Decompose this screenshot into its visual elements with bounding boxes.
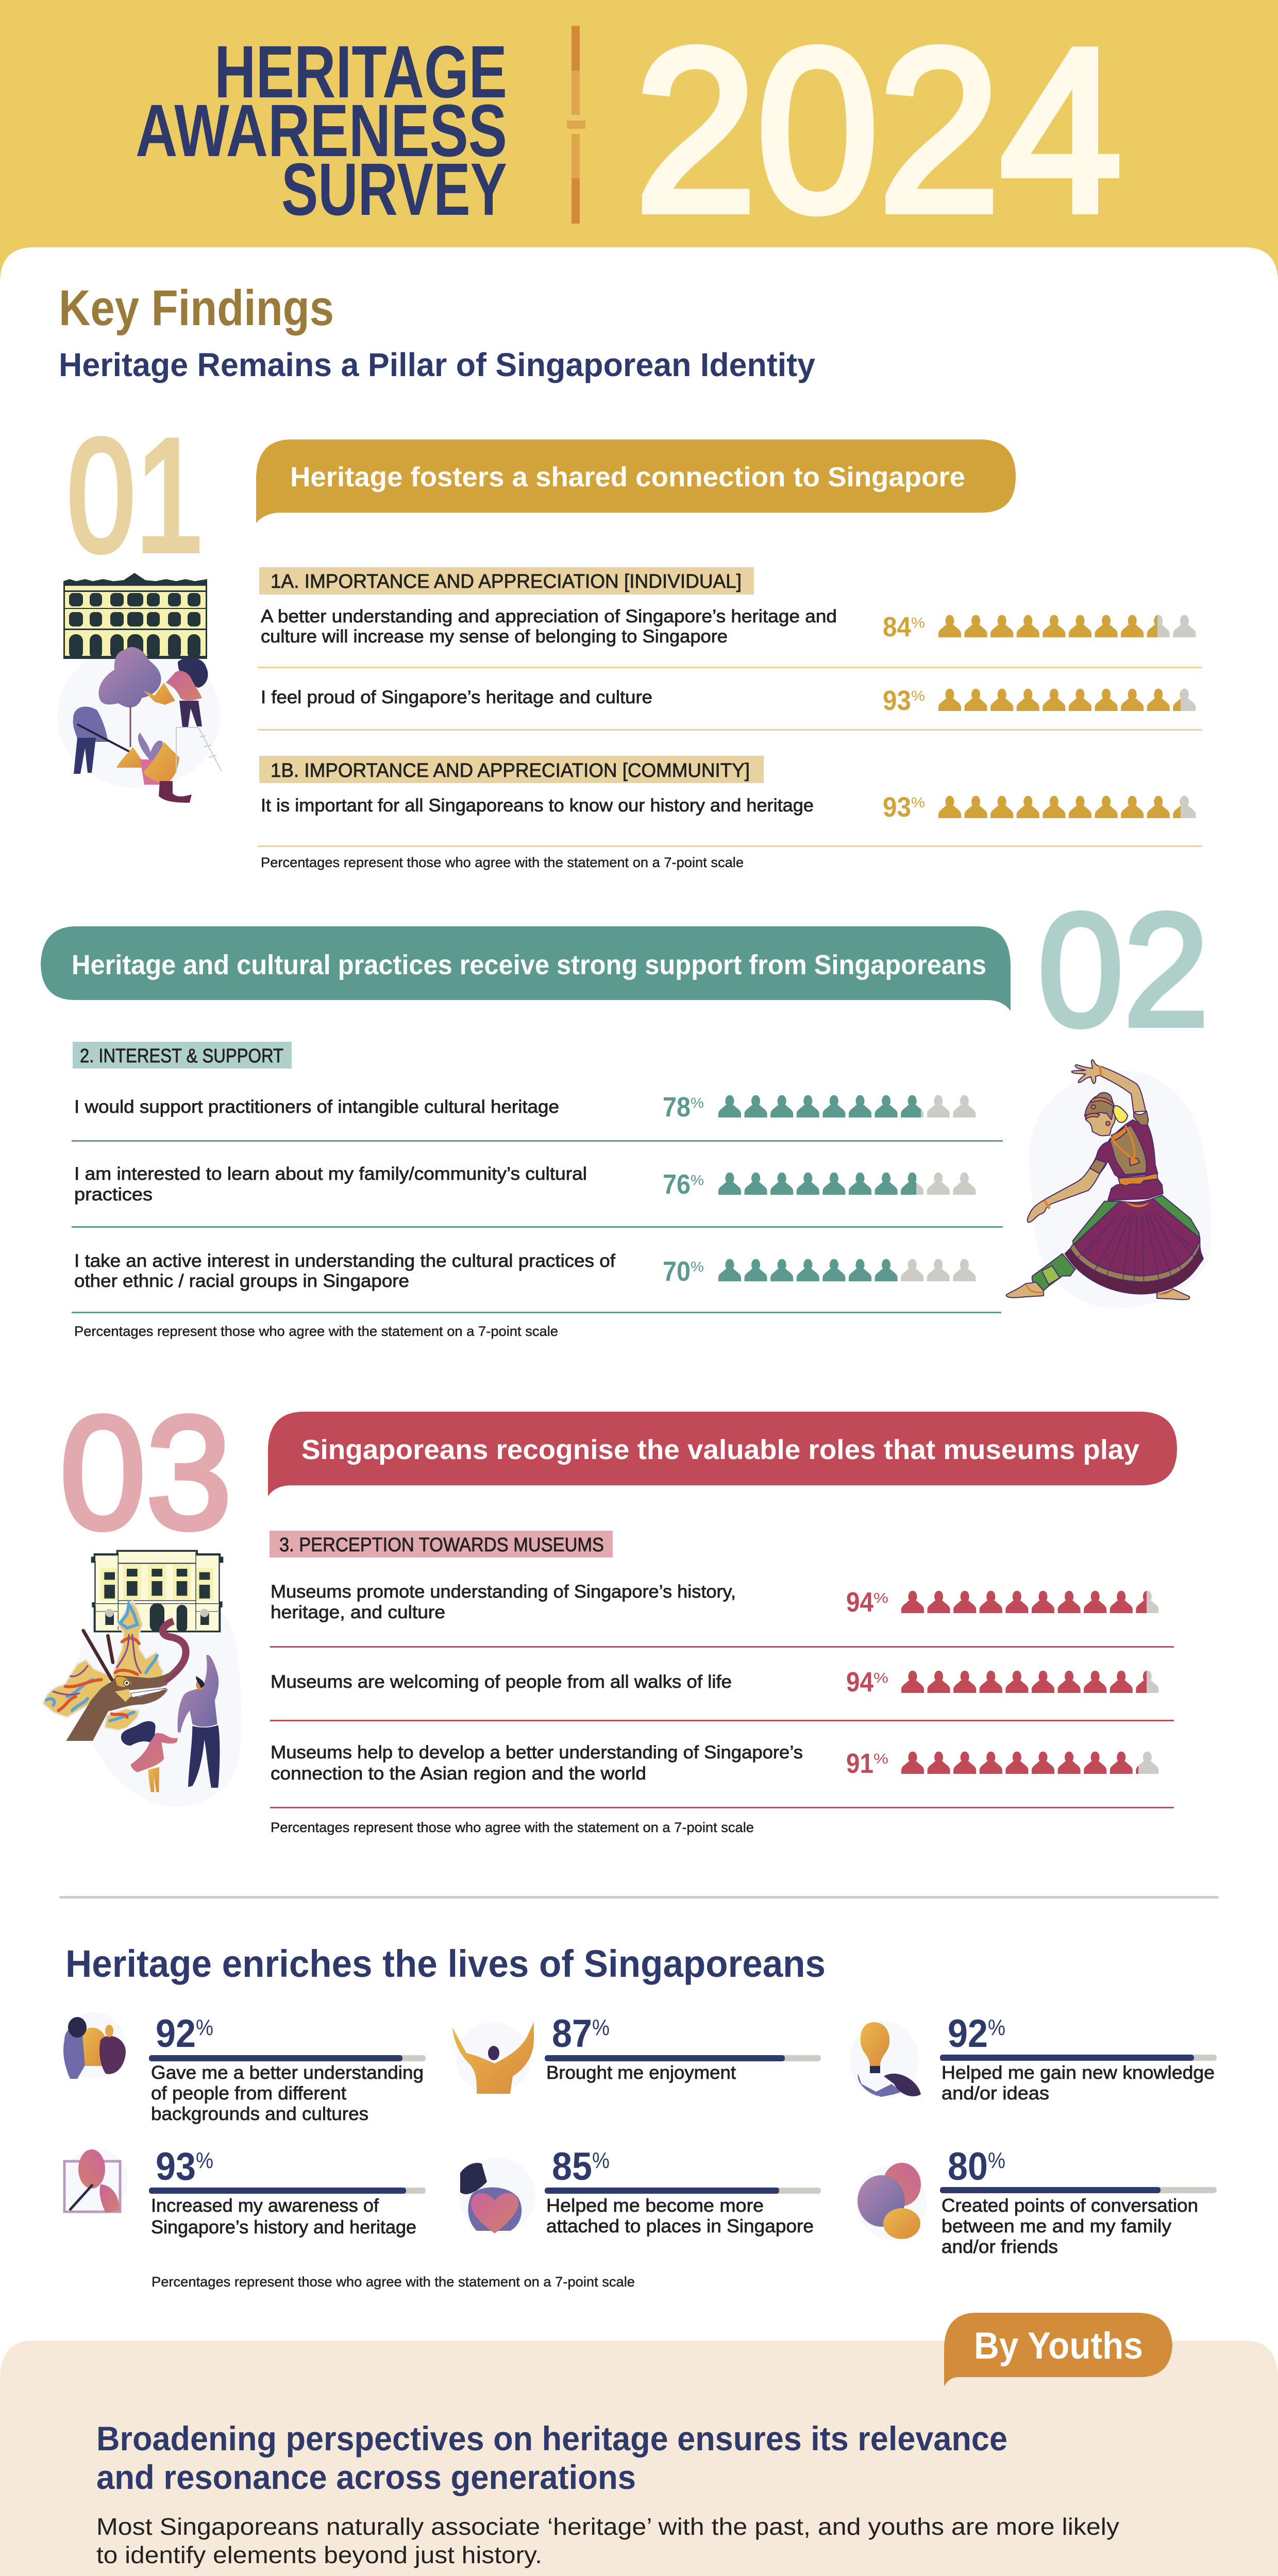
stat: 85% attached: 85 — [552, 2145, 592, 2189]
row: other groups 70%: other ethnic / racial groups in Singapore — [74, 1271, 409, 1291]
row: other groups 70%: % — [691, 1259, 704, 1275]
stat: 85% attached: % — [592, 2148, 610, 2173]
stat: 93% awareness: Increased my awareness of — [151, 2195, 379, 2216]
tag 2: 2. INTEREST & SUPPORT — [80, 1045, 283, 1067]
row: other groups 70%: I take an active interest in understanding the cultural practices of — [74, 1251, 615, 1271]
row: support practitioners 78% — [75, 1095, 976, 1117]
banner 01: Heritage fosters a shared connection to Singapore — [290, 462, 965, 493]
header divider — [567, 26, 585, 224]
row: know our history 93%: 93 — [883, 792, 911, 823]
row: promote understanding 94%: Museums promote understanding of Singapore’s history, — [271, 1582, 736, 1602]
illustration: dancer — [1006, 1060, 1211, 1309]
panel: finding 02 — [41, 880, 1211, 1339]
row: know our history 93% — [262, 795, 1196, 818]
row: promote understanding 94% — [271, 1582, 1158, 1622]
banner 03 — [268, 1412, 1177, 1496]
stat: 92% knowledge: Helped me gain new knowledge — [941, 2062, 1215, 2083]
stat: 80% conversation: and/or friends — [941, 2236, 1058, 2257]
title: Heritage Awareness Survey — [136, 30, 507, 231]
numeral 03: 03 — [60, 1383, 232, 1563]
heading: broadening perspectives — [96, 2419, 1007, 2496]
stat: 85% attached — [459, 2145, 821, 2236]
row: welcoming 94%: % — [873, 1670, 888, 1686]
stat: 87% enjoyment: Brought me enjoyment — [546, 2062, 736, 2083]
numeral 01: 01 — [67, 406, 204, 585]
title: Heritage Awareness Survey: AWARENESS — [136, 89, 507, 172]
heading: broadening perspectives: Broadening perspectives on heritage ensures its relevance — [96, 2419, 1007, 2458]
panel: finding 01 — [57, 406, 1202, 870]
stat: 93% awareness: Singapore’s history and heritage — [151, 2216, 416, 2238]
stat: 80% conversation: Created points of conversation — [941, 2195, 1198, 2216]
badge: By Youths — [944, 2313, 1172, 2386]
banner 03: Singaporeans recognise the valuable roles that museums play — [301, 1434, 1139, 1465]
stat: 80% conversation: between me and my family — [941, 2215, 1171, 2236]
row: sense of belonging 84%: 84 — [883, 612, 911, 642]
tag 3: 3. PERCEPTION TOWARDS MUSEUMS — [279, 1534, 604, 1556]
stat: 92% knowledge: and/or ideas — [941, 2082, 1049, 2104]
heading: Key Findings: Key Findings — [59, 280, 334, 336]
stat: 87% enjoyment — [452, 2012, 821, 2094]
heading: Heritage enriches the lives of Singaporeans — [65, 1942, 826, 1985]
year 2024: 2024 — [635, 1, 1122, 260]
panel: finding 03 — [43, 1383, 1177, 1835]
row: proud 93% — [262, 688, 1196, 711]
banner 01 — [256, 439, 1016, 523]
subheading: Heritage Remains a Pillar of Singaporean Identity — [59, 346, 815, 383]
stat: 87% enjoyment: 87 — [552, 2012, 592, 2056]
stat: 92% understanding: % — [196, 2015, 213, 2040]
body text: broadening — [96, 2513, 1119, 2568]
row: other groups 70% — [74, 1251, 976, 1291]
row: welcoming 94%: 94 — [846, 1667, 873, 1698]
row: sense of belonging 84%: A better understanding and appreciation of Singapore’s heritage and — [261, 606, 837, 626]
body text: broadening: Most Singaporeans naturally associate ‘heritage’ with the past, and youths are more likely — [96, 2513, 1119, 2540]
row: welcoming 94%: Museums are welcoming of people from all walks of life — [271, 1672, 732, 1692]
row: sense of belonging 84%: culture will increase my sense of belonging to Singapore — [261, 626, 728, 647]
row: family practices 76%: I am interested to learn about my family/community’s cultural — [74, 1164, 587, 1184]
row: sense of belonging 84% — [261, 606, 1196, 647]
stat: 80% conversation — [856, 2145, 1217, 2257]
stat: 93% awareness — [64, 2145, 426, 2238]
banner 02: Heritage and cultural practices receive strong support from Singaporeans — [72, 950, 986, 980]
row: support practitioners 78%: % — [691, 1095, 704, 1111]
row: family practices 76%: % — [691, 1172, 704, 1188]
row: Asian connection 91% — [271, 1742, 1158, 1784]
footnote 02: Percentages represent those who agree with the statement on a 7-point scale — [74, 1324, 558, 1339]
stat: 92% understanding — [62, 2012, 426, 2124]
row: promote understanding 94%: 94 — [846, 1587, 873, 1618]
footnote enriches: Percentages represent those who agree with the statement on a 7-point scale — [152, 2274, 635, 2290]
stat: 92% knowledge: % — [988, 2015, 1005, 2040]
row: Asian connection 91%: Museums help to develop a better understanding of Singapore’s — [271, 1742, 803, 1762]
row: proud 93%: 93 — [883, 685, 911, 716]
stat: 80% conversation: % — [988, 2148, 1005, 2173]
banner 02 — [41, 926, 1011, 1011]
row: sense of belonging 84%: % — [911, 615, 925, 631]
row: other groups 70%: 70 — [663, 1256, 691, 1287]
numeral 02: 02 — [1038, 880, 1209, 1060]
panel: heritage enriches lives — [62, 1942, 1217, 2290]
row: support practitioners 78%: 78 — [663, 1092, 691, 1123]
stat: 92% knowledge — [850, 2012, 1217, 2104]
tag 1B: 1B. IMPORTANCE AND APPRECIATION [COMMUNITY] — [271, 760, 750, 782]
row: proud 93%: % — [911, 688, 925, 704]
footnote 01: Percentages represent those who agree with the statement on a 7-point scale — [261, 855, 744, 870]
stat: 92% understanding: 92 — [156, 2012, 196, 2056]
row: promote understanding 94%: heritage, and culture — [271, 1602, 445, 1622]
row: family practices 76%: 76 — [663, 1169, 691, 1200]
stat: 92% understanding: of people from different — [151, 2082, 346, 2104]
row: promote understanding 94%: % — [873, 1590, 888, 1606]
row: welcoming 94% — [271, 1667, 1158, 1698]
stat: 85% attached: attached to places in Singapore — [546, 2215, 814, 2236]
row: Asian connection 91%: % — [873, 1751, 888, 1767]
stat: 92% knowledge: 92 — [948, 2012, 988, 2056]
panel: youth background — [0, 2341, 1278, 2576]
stat: 92% understanding: backgrounds and cultures — [151, 2103, 368, 2124]
stat: 93% awareness: % — [196, 2148, 213, 2173]
stat: 93% awareness: 93 — [156, 2145, 196, 2189]
row: Asian connection 91%: connection to the Asian region and the world — [271, 1764, 646, 1784]
badge: By Youths: By Youths — [974, 2325, 1143, 2367]
row: proud 93%: I feel proud of Singapore’s heritage and culture — [261, 687, 652, 707]
stat: 92% understanding: Gave me a better understanding — [151, 2062, 424, 2083]
body text: broadening: to identify elements beyond just history. — [96, 2541, 542, 2568]
header background — [0, 0, 1278, 289]
row: family practices 76% — [74, 1164, 976, 1205]
row: know our history 93%: It is important for all Singaporeans to know our history and heritage — [261, 795, 814, 816]
illustration: museum and wayang — [43, 1550, 242, 1807]
tag 1A: 1A. IMPORTANCE AND APPRECIATION [INDIVIDUAL] — [271, 571, 742, 592]
row: family practices 76%: practices — [74, 1184, 153, 1205]
title: Heritage Awareness Survey: HERITAGE — [214, 30, 507, 113]
footnote 03: Percentages represent those who agree with the statement on a 7-point scale — [271, 1820, 754, 1835]
row: know our history 93%: % — [911, 794, 925, 810]
row: Asian connection 91%: 91 — [846, 1748, 873, 1779]
stat: 87% enjoyment: % — [592, 2015, 610, 2040]
illustration: shophouse and gardeners — [57, 573, 222, 803]
stat: 85% attached: Helped me become more — [546, 2195, 764, 2216]
stat: 80% conversation: 80 — [948, 2145, 988, 2189]
title: Heritage Awareness Survey: SURVEY — [281, 148, 507, 231]
row: support practitioners 78%: I would support practitioners of intangible cultural heritage — [74, 1097, 559, 1117]
heading: broadening perspectives: and resonance across generations — [96, 2458, 636, 2496]
